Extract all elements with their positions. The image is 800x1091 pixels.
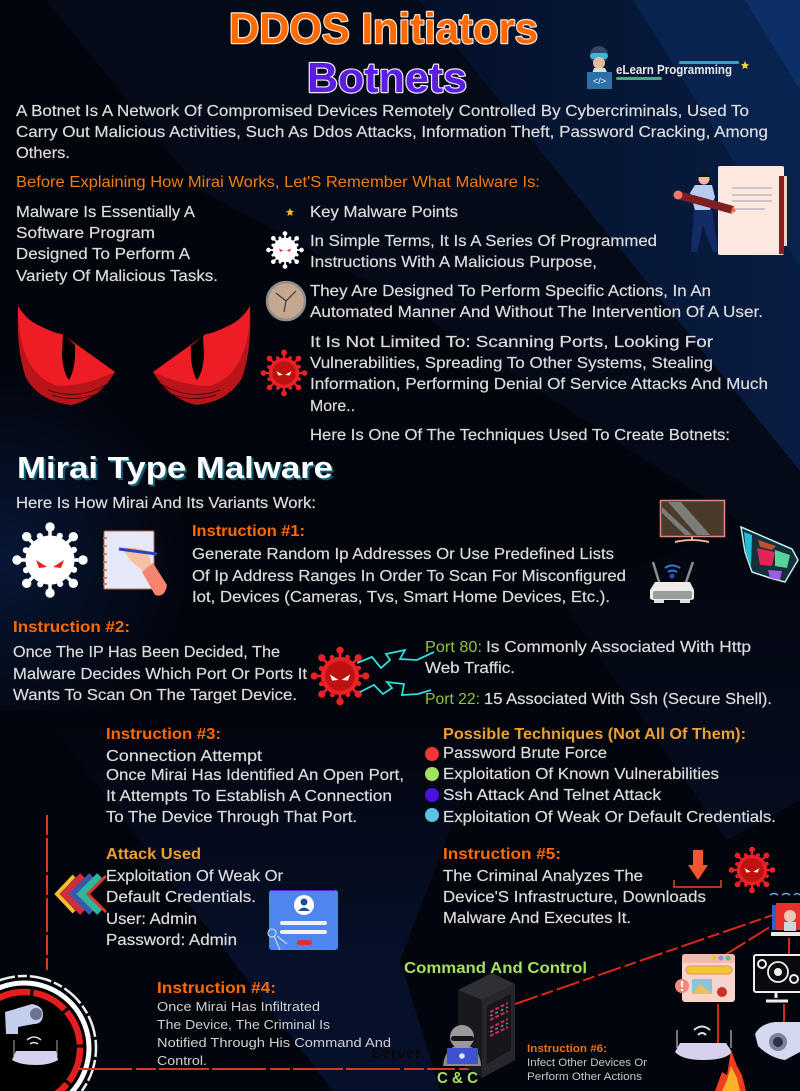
label: C and C: C & C	[437, 1070, 478, 1087]
panel: instruction 1: Generate Random Ip Addresses Or Use Predefined Lists	[192, 546, 614, 563]
text: malware definition: Designed To Perform A	[16, 246, 190, 263]
arrow: dashed link from camera up to instruction 3	[46, 815, 48, 970]
panel: instruction 4: The Device, The Criminal Is	[157, 1017, 331, 1032]
heading: Mirai Type Malware: Mirai Type Malware	[17, 450, 333, 485]
intro paragraph: A Botnet Is A Network Of Compromised Devices Remotely Controlled By Cybercriminals, Used To	[16, 103, 749, 120]
title: Botnets	[307, 54, 467, 101]
panel: instruction 2	[13, 619, 308, 704]
panel: possible techniques: Ssh Attack And Telnet Attack	[443, 787, 662, 804]
panel: instruction 5: Device'S Infrastructure, Downloads	[443, 889, 706, 906]
icon: person with notebook	[674, 166, 787, 255]
panel: instruction 2: Wants To Scan On The Target Device.	[13, 687, 297, 704]
icon: hacked monitor	[754, 955, 800, 1001]
panel: instruction 4: Once Mirai Has Infiltrated	[157, 999, 320, 1014]
icon: security camera on network	[755, 1022, 800, 1060]
panel: instruction 4	[157, 980, 391, 1068]
text: key malware points: They Are Designed To Perform Specific Actions, In An	[310, 283, 711, 300]
panel: instruction 1: Instruction #1:	[192, 523, 305, 540]
panel: attack used: Exploitation Of Weak Or	[106, 868, 284, 885]
heading: command and control: Command And Control	[404, 960, 587, 977]
orange subheading: Before Explaining How Mirai Works, Let'S Remember What Malware Is:	[16, 174, 540, 191]
icon: login card	[268, 890, 338, 950]
icon: router	[650, 562, 694, 603]
panel: instruction 4: Instruction #4:	[157, 980, 276, 997]
text: ports: Web Traffic.	[425, 660, 515, 677]
text: ports: 15 Associated With Ssh (Secure Shell).	[484, 691, 772, 708]
text: key malware points: Information, Performing Denial Of Service Attacks And Much	[310, 376, 768, 393]
logo: eLearn Programming: eLearn Programming	[616, 62, 732, 77]
panel: instruction 3: It Attempts To Establish A Connection	[106, 788, 392, 805]
text: key malware points: Key Malware Points	[310, 204, 458, 221]
logo: eLearn Programming: </>	[593, 76, 606, 86]
text: key malware points	[310, 204, 768, 444]
icon: flame	[715, 1050, 746, 1091]
panel: possible techniques: Exploitation Of Known Vulnerabilities	[443, 766, 719, 783]
intro paragraph: Carry Out Malicious Activities, Such As Ddos Attacks, Information Theft, Password Cracking, Among	[16, 124, 768, 141]
icon: white virus	[266, 231, 304, 269]
arrow: dashed links across network	[515, 915, 789, 1050]
icon: television	[660, 500, 724, 542]
text: malware definition: Malware Is Essentially A	[16, 204, 195, 221]
icon: robot on infected laptop	[770, 894, 800, 936]
panel: attack used	[106, 846, 284, 949]
icon: red virus with wires	[311, 647, 434, 705]
panel: instruction 2: Malware Decides Which Port Or Ports It	[13, 666, 308, 683]
icon: infected browser window	[675, 954, 735, 1002]
text: ports: Is Commonly Associated With Http	[486, 639, 751, 656]
panel: instruction 1: Iot, Devices (Cameras, Tvs, Smart Home Devices, Etc.).	[192, 589, 610, 606]
text: key malware points: Instructions With A Malicious Purpose,	[310, 254, 597, 271]
panel: instruction 6	[527, 1043, 647, 1083]
text: key malware points: Automated Manner And Without The Intervention Of A User.	[310, 304, 763, 321]
text: key malware points: Here Is One Of The Techniques Used To Create Botnets:	[310, 427, 730, 444]
panel: possible techniques: Exploitation Of Weak Or Default Credentials.	[443, 809, 776, 826]
arrow: dashed link from camera to C and C	[78, 1068, 480, 1070]
panel: instruction 4: Control.	[157, 1053, 207, 1068]
intro paragraph	[16, 103, 768, 162]
label: server: Server	[371, 1045, 421, 1062]
panel: possible techniques	[425, 726, 776, 826]
panel: attack used: Default Credentials.	[106, 889, 256, 906]
icon: server rack and hacker	[443, 973, 515, 1078]
panel: attack used: Attack Used	[106, 846, 201, 863]
text: key malware points: Vulnerabilities, Spreading To Other Systems, Stealing	[310, 355, 713, 372]
panel: instruction 1: Of Ip Address Ranges In Order To Scan For Misconfigured	[192, 568, 626, 585]
panel: instruction 6: Perform Other Actions	[527, 1071, 643, 1083]
logo: eLearn Programming	[587, 46, 749, 89]
text: ports: Port 22:	[425, 691, 480, 708]
icon: glitched security camera	[741, 527, 798, 582]
heading: Mirai Type Malware: Mirai Type Malware	[19, 452, 335, 487]
panel: instruction 5: Instruction #5:	[443, 846, 561, 863]
panel: instruction 6: Instruction #6:	[527, 1043, 607, 1055]
text: ports	[425, 639, 772, 708]
panel: instruction 3	[106, 726, 404, 826]
panel: possible techniques: Possible Techniques (Not All Of Them):	[443, 726, 746, 743]
panel: instruction 3: Instruction #3:	[106, 726, 221, 743]
panel: possible techniques: Password Brute Force	[443, 745, 607, 762]
icon: large white virus	[13, 523, 87, 597]
panel: attack used: Password: Admin	[106, 932, 237, 949]
panel: instruction 3: Connection Attempt	[106, 748, 263, 765]
title	[229, 5, 538, 101]
icon: download arrow	[674, 850, 721, 887]
icon: infected devices badge	[0, 976, 96, 1091]
text: ports: Port 80:	[425, 639, 482, 656]
panel: attack used: User: Admin	[106, 911, 197, 928]
panel: instruction 3: Once Mirai Has Identified An Open Port,	[106, 767, 404, 784]
icon: hand writing on notepad	[103, 531, 167, 596]
text: key malware points: It Is Not Limited To: Scanning Ports, Looking For	[310, 334, 714, 351]
text: key malware points: In Simple Terms, It Is A Series Of Programmed	[310, 233, 657, 250]
panel: instruction 3: To The Device Through That Port.	[106, 809, 357, 826]
text: key malware points: More..	[310, 398, 355, 415]
text: malware definition: Variety Of Malicious Tasks.	[16, 268, 218, 285]
icon: red eyes	[18, 306, 250, 405]
icon: clock	[267, 282, 305, 320]
icon: router on network	[675, 1026, 732, 1060]
panel: instruction 1	[192, 523, 626, 606]
icon: chevrons	[57, 876, 106, 912]
text: how Mirai works: Here Is How Mirai And Its Variants Work:	[16, 495, 316, 512]
panel: instruction 5	[443, 846, 706, 927]
panel: instruction 6: Infect Other Devices Or	[527, 1057, 647, 1069]
text: malware definition	[16, 204, 218, 285]
text: malware definition: Software Program	[16, 225, 155, 242]
panel: instruction 5: Malware And Executes It.	[443, 910, 631, 927]
panel: instruction 2: Once The IP Has Been Decided, The	[13, 644, 280, 661]
icon: star	[286, 208, 294, 216]
icon: red virus	[261, 350, 307, 396]
panel: instruction 2: Instruction #2:	[13, 619, 130, 636]
icon: red virus at download	[729, 847, 775, 893]
intro paragraph: Others.	[16, 145, 70, 162]
panel: instruction 4: Notified Through His Command And	[157, 1035, 391, 1050]
title: DDOS Initiators	[229, 5, 538, 53]
panel: instruction 5: The Criminal Analyzes The	[443, 868, 643, 885]
